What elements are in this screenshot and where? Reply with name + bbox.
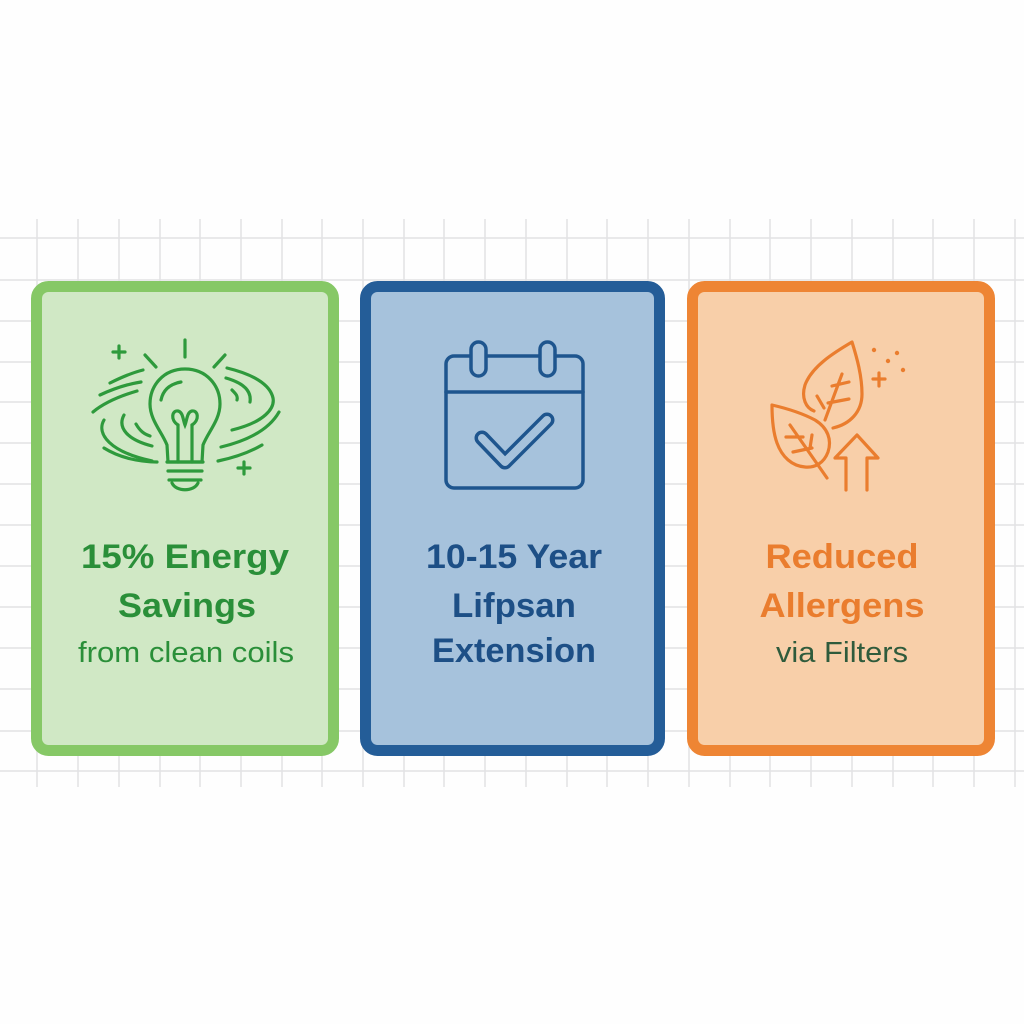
icon: lightbulb <box>93 340 279 490</box>
panel: energy savings: Savings <box>118 587 256 625</box>
panel: lifespan: Lifpsan <box>452 587 576 625</box>
panel: energy savings <box>36 286 334 750</box>
icon: leaves and arrow <box>772 342 885 490</box>
heading: lifespan: 10-15 Year <box>426 538 602 576</box>
text: from clean coils: from clean coils <box>78 637 294 669</box>
panel: lifespan <box>366 286 660 750</box>
text: via filters: via Filters <box>776 637 908 669</box>
panel: lifespan: Extension <box>432 632 596 670</box>
heading: energy: 15% Energy <box>81 538 289 576</box>
panel: allergens: Allergens <box>760 587 924 625</box>
heading: allergens: Reduced <box>766 538 918 576</box>
panel: allergens <box>692 286 990 750</box>
icon: calendar check <box>446 342 583 488</box>
